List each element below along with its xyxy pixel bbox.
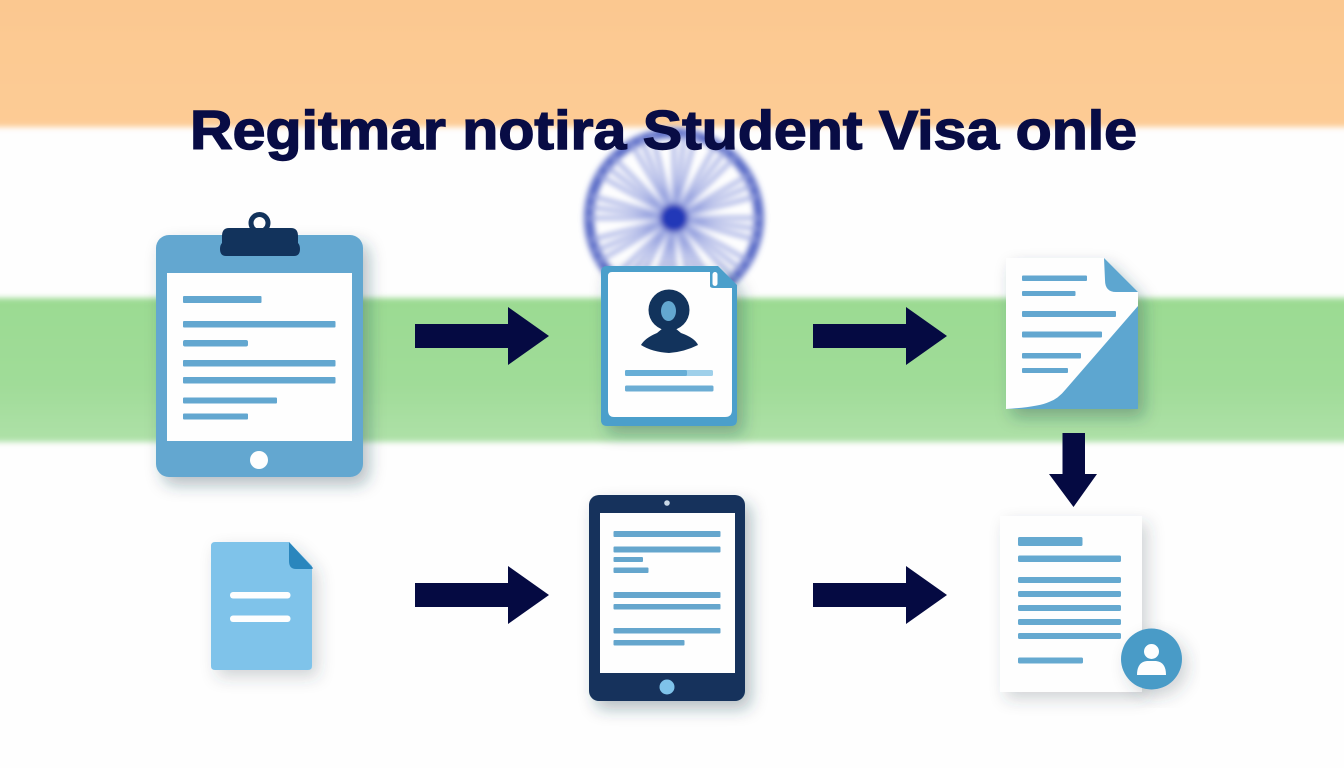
- clipboard text lines: [183, 296, 336, 420]
- flag band: saffron: [0, 0, 1344, 127]
- arrow: step 2 to 3: [813, 307, 947, 365]
- tablet text lines: [614, 531, 720, 646]
- chakra wheel: [588, 132, 760, 304]
- profile corner notch: [712, 272, 718, 286]
- profile avatar: [641, 290, 698, 353]
- tablet home button: [660, 680, 674, 694]
- icon: blue document: [211, 542, 313, 670]
- arrow: step 6 to 4 lower right: [813, 566, 947, 624]
- icon: tablet: [589, 495, 745, 701]
- flag band: green: [0, 298, 1344, 442]
- icon: folded document: [1006, 258, 1138, 409]
- icon: final document with user badge: [1000, 516, 1182, 692]
- user badge: [1121, 628, 1182, 690]
- arrow: step 1 to 2: [415, 307, 549, 365]
- title: Regitmar notira Student Visa onle: [190, 99, 1137, 161]
- icon: clipboard: [156, 214, 363, 477]
- icon: profile document: [601, 266, 737, 426]
- profile text lines: [625, 370, 714, 392]
- blue document lines: [230, 592, 290, 622]
- arrow: step 5 to 6 lower left: [415, 566, 549, 624]
- arrow: step 3 down to 4: [1049, 433, 1097, 507]
- clipboard home button: [250, 451, 268, 469]
- folded document text lines: [1022, 276, 1116, 373]
- final document text lines: [1018, 537, 1121, 664]
- clipboard clip: [220, 214, 300, 256]
